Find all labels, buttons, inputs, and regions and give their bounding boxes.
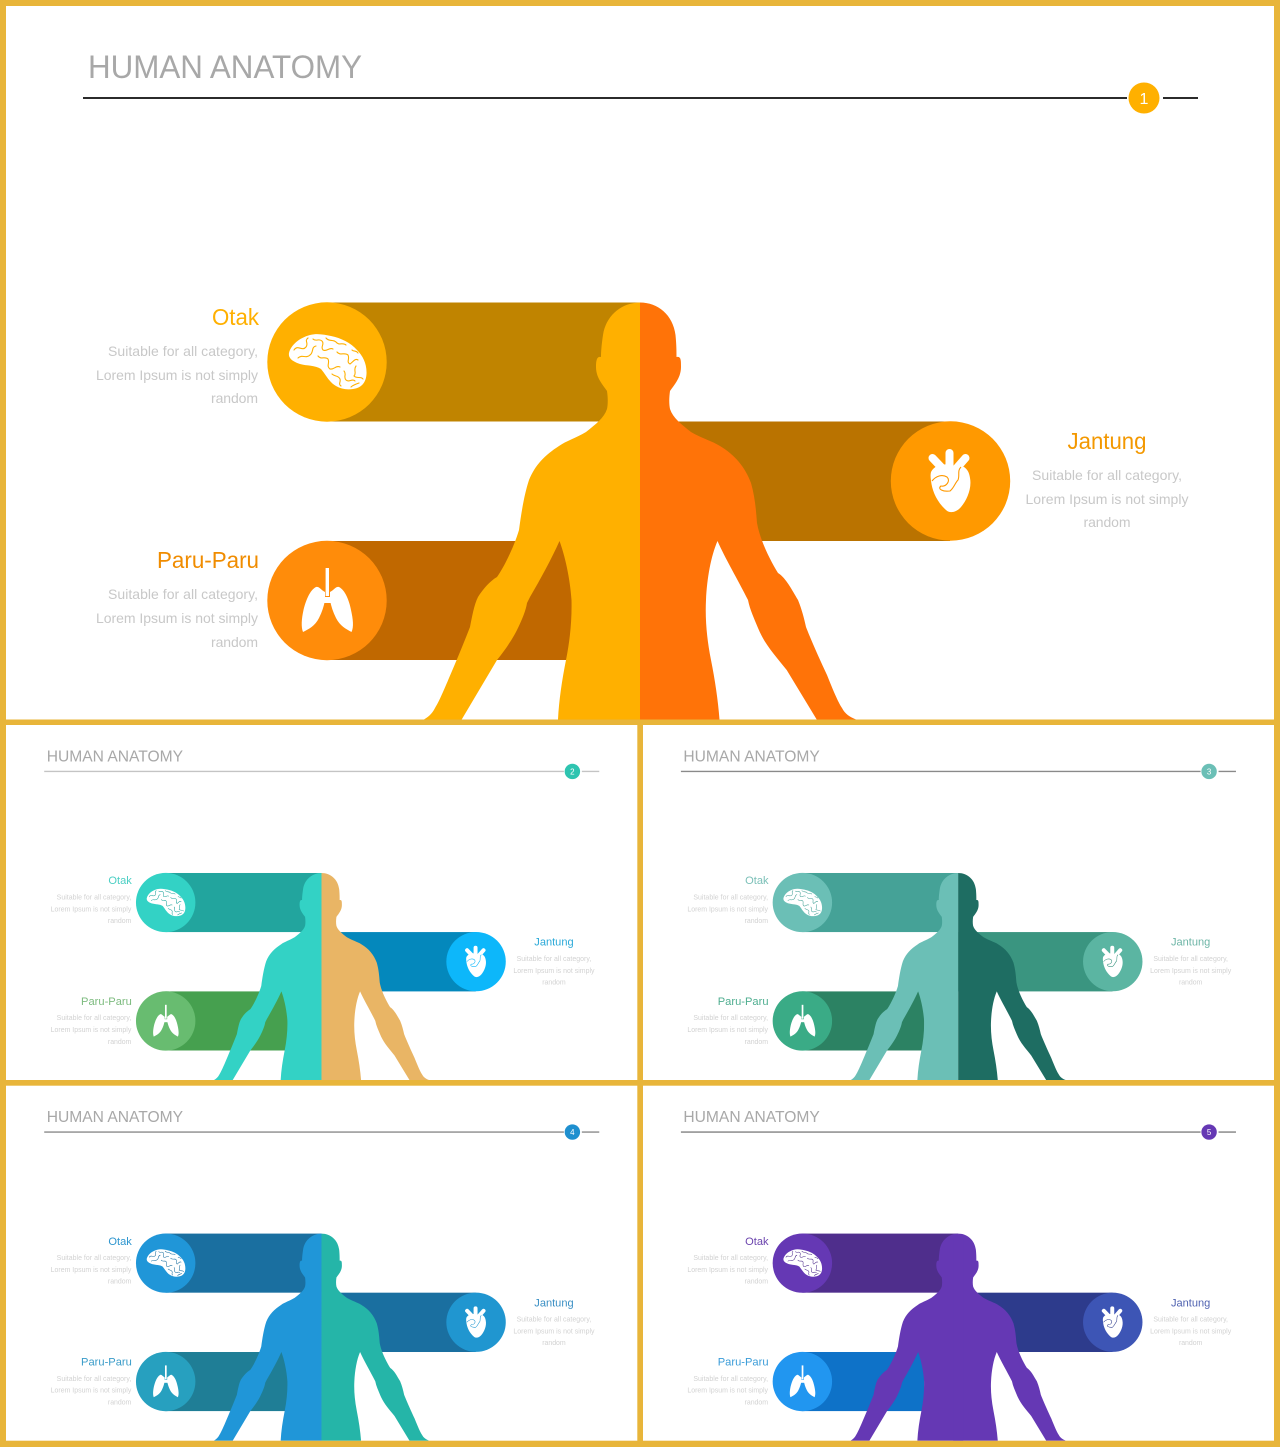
text: Paru-Paru: Lorem Ipsum is not simply bbox=[51, 1388, 132, 1395]
title: HUMAN ANATOMY bbox=[683, 748, 820, 766]
text: Otak: Suitable for all category, bbox=[693, 895, 768, 902]
bar: Otak bbox=[166, 873, 321, 932]
text: Jantung: Lorem Ipsum is not simply bbox=[1150, 1329, 1232, 1336]
bar: Jantung bbox=[958, 1293, 1113, 1352]
text: Jantung: random bbox=[1179, 979, 1203, 986]
text: Paru-Paru: Paru-Paru bbox=[718, 996, 769, 1008]
human body silhouette bbox=[424, 302, 856, 720]
icon: lungs bbox=[773, 991, 832, 1051]
bar: Paru-Paru bbox=[802, 991, 924, 1050]
text: Otak: Otak bbox=[108, 875, 132, 887]
text: Otak bbox=[687, 875, 769, 925]
icon: lungs bbox=[267, 541, 387, 660]
text: Paru-Paru: Lorem Ipsum is not simply bbox=[687, 1388, 769, 1395]
bar: Jantung bbox=[640, 422, 950, 541]
text: Otak bbox=[687, 1236, 769, 1285]
text: Jantung: Jantung bbox=[1068, 428, 1146, 454]
bar: Paru-Paru bbox=[802, 1352, 924, 1411]
text: Jantung: Jantung bbox=[1171, 1297, 1210, 1309]
text: Paru-Paru bbox=[687, 1356, 769, 1407]
text: Otak: Otak bbox=[745, 875, 769, 887]
text: Jantung: random bbox=[542, 979, 566, 986]
panel 2 content bbox=[44, 748, 599, 1080]
text: Jantung: Suitable for all category, bbox=[1153, 1317, 1228, 1324]
panel 3: green slide bbox=[643, 725, 1274, 1080]
text: Otak: Lorem Ipsum is not simply bbox=[51, 1267, 132, 1274]
human body silhouette bbox=[851, 873, 1066, 1080]
icon: brain bbox=[136, 873, 195, 932]
title rule with number badge: 4 bbox=[570, 1128, 575, 1137]
text: Paru-Paru: Paru-Paru bbox=[81, 1356, 132, 1368]
text: Paru-Paru: Suitable for all category, bbox=[693, 1376, 768, 1383]
panel 4: blue slide bbox=[6, 1086, 637, 1441]
title rule with number badge: 3 bbox=[1207, 767, 1212, 776]
text: Paru-Paru: random bbox=[108, 1400, 132, 1407]
text: Jantung bbox=[1150, 1297, 1232, 1347]
title: HUMAN ANATOMY bbox=[47, 1108, 183, 1126]
bar: Paru-Paru bbox=[327, 541, 572, 660]
human body silhouette bbox=[214, 1234, 429, 1441]
text: Jantung bbox=[1026, 428, 1188, 530]
text: Paru-Paru: Lorem Ipsum is not simply bbox=[96, 610, 258, 626]
title rule with number badge: 1 bbox=[1140, 91, 1149, 108]
text: Paru-Paru: Suitable for all category, bbox=[108, 586, 258, 602]
panel 4 content bbox=[44, 1108, 599, 1441]
text: Jantung bbox=[513, 937, 595, 986]
text: Otak: Otak bbox=[108, 1236, 132, 1248]
text: Jantung: Suitable for all category, bbox=[517, 1317, 591, 1324]
text: Paru-Paru bbox=[96, 547, 259, 650]
text: Jantung: Jantung bbox=[1171, 937, 1210, 949]
title rule with number badge bbox=[44, 1124, 599, 1140]
text: Otak: Suitable for all category, bbox=[693, 1255, 768, 1262]
panel 1: orange main slide bbox=[6, 6, 1274, 720]
text: Paru-Paru: Lorem Ipsum is not simply bbox=[51, 1027, 132, 1034]
text: Otak: Suitable for all category, bbox=[108, 343, 258, 359]
icon: lungs bbox=[136, 1352, 195, 1411]
text: Paru-Paru: random bbox=[745, 1039, 768, 1046]
text: Jantung: Suitable for all category, bbox=[1032, 467, 1182, 483]
text: Otak: Lorem Ipsum is not simply bbox=[687, 1267, 769, 1274]
text: Otak bbox=[96, 304, 259, 406]
text: Jantung: Jantung bbox=[534, 1297, 574, 1309]
title rule with number badge bbox=[83, 82, 1198, 114]
title: HUMAN ANATOMY bbox=[88, 49, 362, 85]
text: Jantung: Suitable for all category, bbox=[1153, 956, 1228, 963]
text: Otak: Suitable for all category, bbox=[57, 1255, 131, 1262]
title rule with number badge bbox=[681, 764, 1236, 779]
title rule with number badge: 2 bbox=[570, 767, 575, 776]
bar: Paru-Paru bbox=[166, 1352, 288, 1411]
text: Otak: Otak bbox=[212, 304, 259, 330]
text: Jantung: Suitable for all category, bbox=[517, 956, 591, 963]
bar: Paru-Paru bbox=[166, 991, 288, 1050]
bar: Otak bbox=[327, 302, 640, 422]
text: Otak: random bbox=[745, 1278, 768, 1285]
text: Paru-Paru: random bbox=[745, 1400, 768, 1407]
icon: heart bbox=[1083, 932, 1142, 991]
panel 3 content bbox=[681, 748, 1236, 1080]
bar: Otak bbox=[802, 1234, 958, 1293]
icon: heart bbox=[446, 932, 506, 991]
text: Otak: Lorem Ipsum is not simply bbox=[687, 906, 769, 913]
panel 2: teal and tan slide bbox=[6, 725, 637, 1080]
icon: lungs bbox=[773, 1352, 832, 1411]
text: Paru-Paru bbox=[51, 1356, 132, 1407]
text: Paru-Paru: Paru-Paru bbox=[718, 1356, 769, 1368]
text: Otak bbox=[51, 1236, 132, 1285]
text: Otak: Lorem Ipsum is not simply bbox=[51, 906, 132, 913]
icon: lungs bbox=[136, 991, 195, 1051]
text: Jantung bbox=[1150, 937, 1232, 986]
icon: brain bbox=[773, 1233, 832, 1293]
text: Jantung bbox=[513, 1297, 595, 1347]
text: Jantung: random bbox=[1084, 514, 1130, 530]
text: Jantung: Lorem Ipsum is not simply bbox=[513, 968, 595, 975]
bar: Jantung bbox=[321, 932, 476, 991]
title: HUMAN ANATOMY bbox=[683, 1108, 820, 1126]
text: Otak: Suitable for all category, bbox=[57, 895, 131, 902]
text: Jantung: Lorem Ipsum is not simply bbox=[1026, 491, 1188, 507]
text: Jantung: Lorem Ipsum is not simply bbox=[1150, 968, 1232, 975]
text: Paru-Paru: Paru-Paru bbox=[81, 996, 132, 1008]
text: Otak: Lorem Ipsum is not simply bbox=[96, 367, 258, 383]
bar: Jantung bbox=[321, 1293, 476, 1352]
human body silhouette bbox=[214, 873, 429, 1080]
text: Jantung: Jantung bbox=[534, 937, 574, 949]
title: HUMAN ANATOMY bbox=[47, 748, 183, 766]
text: Jantung: Lorem Ipsum is not simply bbox=[513, 1329, 595, 1336]
text: Otak: random bbox=[211, 390, 258, 406]
text: Paru-Paru: Paru-Paru bbox=[157, 547, 259, 573]
text: Otak: Otak bbox=[745, 1236, 769, 1248]
bar: Jantung bbox=[958, 932, 1113, 991]
text: Jantung: random bbox=[1179, 1340, 1203, 1347]
icon: brain bbox=[136, 1233, 195, 1293]
text: Paru-Paru: Suitable for all category, bbox=[57, 1376, 131, 1383]
icon: heart bbox=[1083, 1293, 1142, 1352]
text: Jantung: random bbox=[542, 1340, 566, 1347]
text: Paru-Paru: random bbox=[211, 634, 258, 650]
title rule with number badge bbox=[44, 764, 599, 779]
title rule with number badge bbox=[681, 1124, 1236, 1140]
icon: brain bbox=[773, 873, 832, 932]
icon: brain bbox=[267, 302, 387, 422]
icon: heart bbox=[446, 1293, 506, 1352]
text: Otak: random bbox=[108, 918, 132, 925]
bar: Otak bbox=[802, 873, 958, 932]
text: Paru-Paru: Suitable for all category, bbox=[57, 1015, 131, 1022]
text: Paru-Paru: Lorem Ipsum is not simply bbox=[687, 1027, 769, 1034]
bar: Otak bbox=[166, 1234, 321, 1293]
text: Otak: random bbox=[108, 1278, 132, 1285]
panel 5 content bbox=[681, 1108, 1236, 1441]
icon: heart bbox=[891, 421, 1010, 541]
text: Otak bbox=[51, 875, 132, 925]
human body silhouette bbox=[851, 1234, 1066, 1441]
panel 5: purple slide bbox=[643, 1086, 1274, 1441]
text: Paru-Paru bbox=[51, 996, 132, 1046]
text: Paru-Paru: random bbox=[108, 1039, 132, 1046]
text: Paru-Paru: Suitable for all category, bbox=[693, 1015, 768, 1022]
title rule with number badge: 5 bbox=[1207, 1128, 1212, 1137]
text: Paru-Paru bbox=[687, 996, 769, 1046]
text: Otak: random bbox=[745, 918, 768, 925]
